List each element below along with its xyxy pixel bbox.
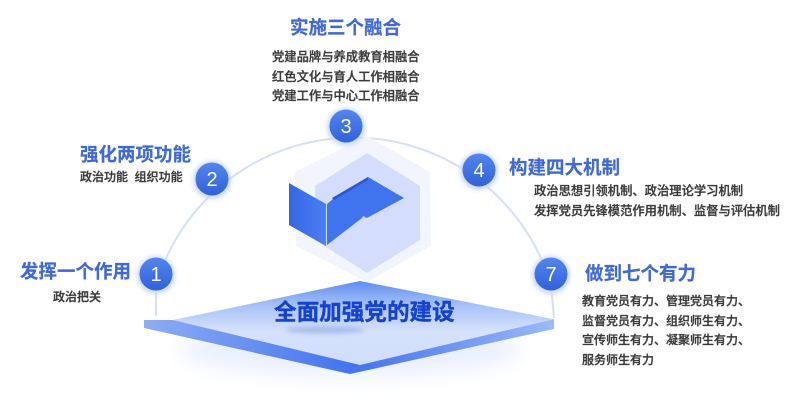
text: 七个有力 details <box>582 294 750 366</box>
text: 三个融合 details: 红色文化与育人工作相融合 <box>272 70 420 84</box>
text: 三个融合 details: 党建工作与中心工作相融合 <box>272 89 420 103</box>
marker 7 <box>532 256 570 294</box>
heading: 发挥一个作用: 发挥一个作用 <box>20 261 131 282</box>
marker 4: 4 <box>473 160 485 182</box>
marker 1: 1 <box>150 264 162 286</box>
marker 7: 7 <box>545 264 557 286</box>
text: 三个融合 details <box>272 50 420 103</box>
text: 七个有力 details: 教育党员有力、管理党员有力、 <box>582 294 750 308</box>
heading: 强化两项功能: 强化两项功能 <box>80 144 191 165</box>
marker 3: 3 <box>340 116 352 138</box>
text: 两项功能 details: 政治功能 组织功能 <box>80 170 183 184</box>
heading: 实施三个融合: 实施三个融合 <box>290 17 401 38</box>
text: 四大机制 details: 发挥党员先锋模范作用机制、监督与评估机制 <box>534 204 780 218</box>
marker 1 <box>137 256 175 294</box>
text: 一个作用 details: 政治把关 <box>53 290 101 304</box>
text: 四大机制 details <box>534 184 780 218</box>
marker 3 <box>327 108 365 146</box>
text: 七个有力 details: 服务师生有力 <box>582 352 654 366</box>
marker 2: 2 <box>206 169 218 191</box>
platform shadow <box>180 324 520 376</box>
hexagon background <box>295 136 431 282</box>
marker 2 <box>193 161 231 199</box>
heading: 构建四大机制: 构建四大机制 <box>509 157 620 178</box>
title: 全面加强党的建设: 全面加强党的建设 <box>274 300 455 325</box>
arc connector <box>156 138 554 318</box>
icon: blue cube logo <box>289 177 404 246</box>
text: 四大机制 details: 政治思想引领机制、政治理论学习机制 <box>534 184 743 198</box>
text: 七个有力 details: 监督党员有力、组织师生有力、 <box>582 314 750 328</box>
platform: diamond base <box>144 281 554 374</box>
text: 七个有力 details: 宣传师生有力、凝聚师生有力、 <box>582 333 750 347</box>
heading: 做到七个有力: 做到七个有力 <box>585 263 696 284</box>
text: 三个融合 details: 党建品牌与养成教育相融合 <box>272 50 420 64</box>
marker 4 <box>460 152 498 190</box>
